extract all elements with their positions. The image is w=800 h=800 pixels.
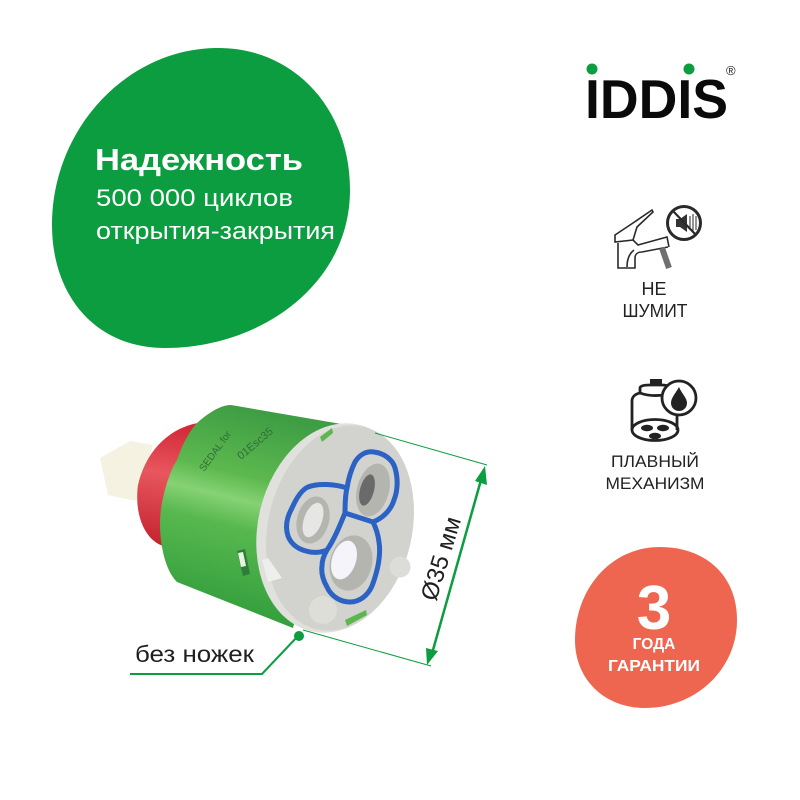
openings (291, 460, 395, 595)
blue seal (287, 452, 397, 602)
grey face (236, 407, 434, 649)
label: diameter: Ø35 мм (416, 514, 467, 604)
text: cycles (96, 185, 335, 245)
label: no noise: ШУМИТ (622, 301, 688, 321)
label: smooth mechanism: ПЛАВНЫЙ (611, 452, 699, 471)
callout: no legs: без ножек (135, 641, 255, 667)
heading: reliability: Надежность (95, 142, 303, 177)
text: cycles: 500 000 циклов (96, 185, 293, 212)
green body (160, 405, 347, 628)
panel: warranty red blob (575, 547, 737, 708)
label: smooth mechanism (606, 452, 704, 493)
product: cartridge (100, 405, 434, 649)
dimension: 35 mm (303, 433, 487, 666)
product: cartridge: SEDAL for (198, 429, 234, 474)
label: no noise (622, 279, 688, 321)
pins (390, 556, 410, 578)
logo: IDDIS: ® (726, 63, 736, 78)
text: warranty (608, 636, 700, 675)
logo: IDDIS: IDDIS (585, 68, 728, 130)
callout: no legs (130, 631, 304, 674)
text: cycles: открытия-закрытия (96, 218, 335, 245)
number: 3 years: 3 (637, 574, 671, 643)
stem (100, 441, 153, 501)
red collar (137, 423, 200, 546)
label: smooth mechanism: МЕХАНИЗМ (606, 474, 704, 493)
icon: quiet faucet (615, 206, 700, 268)
text: warranty: ГОДА (633, 636, 675, 653)
icon: smooth mechanism (632, 379, 696, 440)
label: no noise: НЕ (641, 279, 667, 299)
panel: reliability green blob (52, 48, 350, 348)
text: warranty: ГАРАНТИИ (608, 658, 700, 675)
product: cartridge: 01Esc35 (235, 426, 276, 462)
